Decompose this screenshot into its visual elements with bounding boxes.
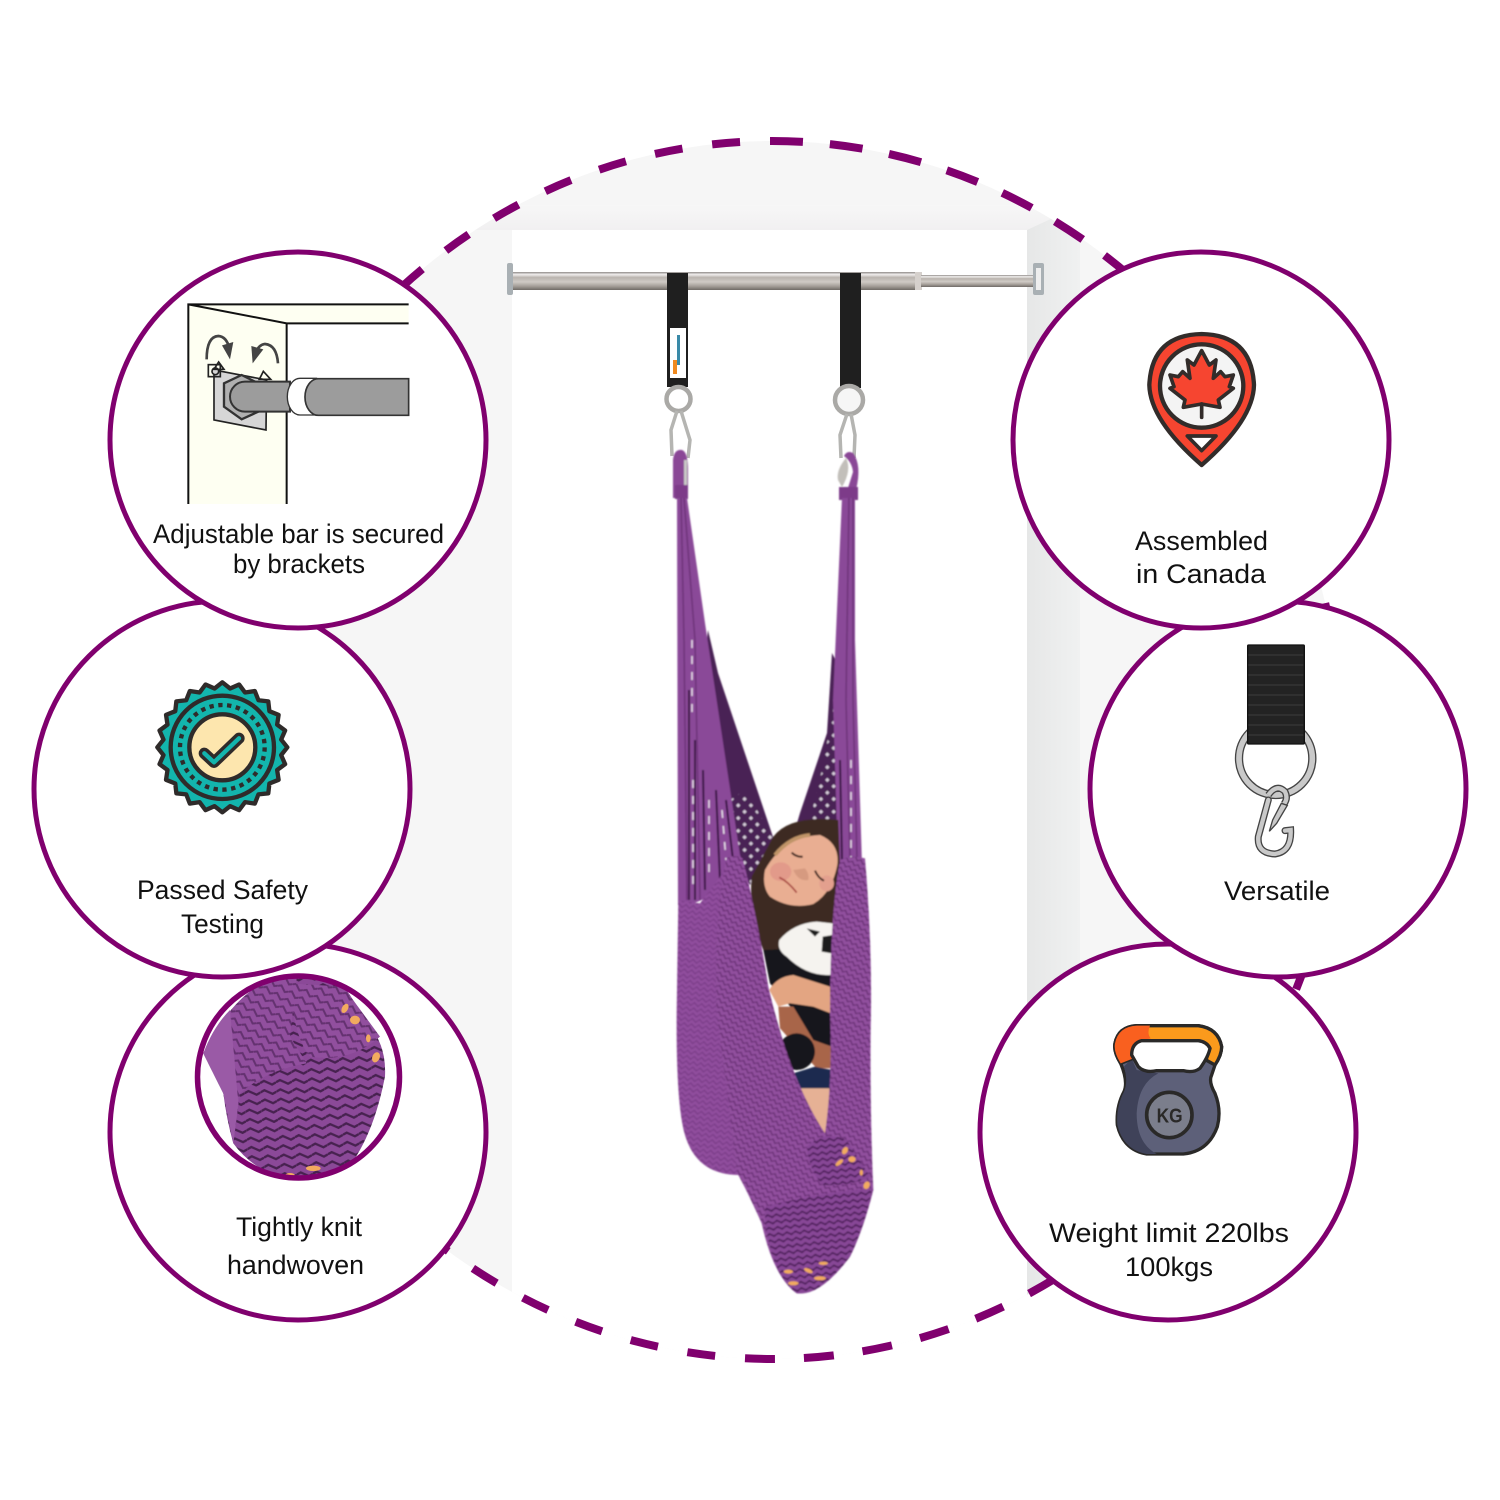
caption: in Canada xyxy=(1136,559,1267,589)
hammock back netting xyxy=(700,630,842,885)
hammock back lobe xyxy=(677,855,750,1175)
panel: tightly knit handwoven xyxy=(110,944,486,1320)
caption: by brackets xyxy=(233,549,365,579)
caption xyxy=(137,875,308,939)
icon: kettlebell xyxy=(1115,1026,1222,1154)
left strap with ring and carabiner xyxy=(666,273,690,458)
icon: canada map pin xyxy=(1149,334,1254,465)
child shirt and plush panda xyxy=(763,922,833,1047)
caption: Adjustable bar is secured xyxy=(153,519,444,549)
panel: weight limit xyxy=(980,944,1356,1320)
caption: Weight limit 220lbs xyxy=(1049,1218,1289,1248)
caption xyxy=(153,519,444,579)
infographic canvas xyxy=(32,137,1468,1363)
icon: kettlebell: KG xyxy=(1157,1105,1183,1128)
icon: bar and bracket diagram xyxy=(188,304,409,504)
caption: Versatile xyxy=(1224,876,1330,906)
hammock front panel xyxy=(716,856,873,1294)
right strap with ring and carabiner xyxy=(835,273,863,458)
background: doorway scene xyxy=(326,141,1325,1294)
caption xyxy=(1135,526,1268,589)
child face xyxy=(764,835,838,906)
caption: 100kgs xyxy=(1125,1252,1213,1282)
icon: strap with ring and hook xyxy=(1239,645,1312,854)
icon: safety badge xyxy=(157,682,287,812)
knit close-up photo xyxy=(198,976,400,1180)
panel: assembled in canada xyxy=(1013,252,1389,628)
adjustable pull-up bar xyxy=(507,263,1044,295)
panel: passed safety testing xyxy=(34,601,410,977)
caption: Passed Safety xyxy=(137,875,308,905)
hammock with child xyxy=(673,450,873,1294)
hammock foot pouch xyxy=(765,1136,873,1294)
hammock lower body and child, local coordinates xyxy=(677,819,873,1294)
dashed ring xyxy=(202,141,1342,1359)
child hair xyxy=(751,819,840,953)
panel: adjustable bar xyxy=(110,252,486,628)
child arm and legs xyxy=(769,975,832,1137)
caption: Testing xyxy=(181,909,264,939)
panel: versatile xyxy=(1090,601,1466,977)
caption: Assembled xyxy=(1135,526,1268,556)
caption: handwoven xyxy=(227,1250,364,1280)
caption: Tightly knit xyxy=(236,1212,362,1242)
caption xyxy=(1049,1218,1289,1282)
caption xyxy=(227,1212,364,1280)
hammock ropes xyxy=(673,450,862,905)
